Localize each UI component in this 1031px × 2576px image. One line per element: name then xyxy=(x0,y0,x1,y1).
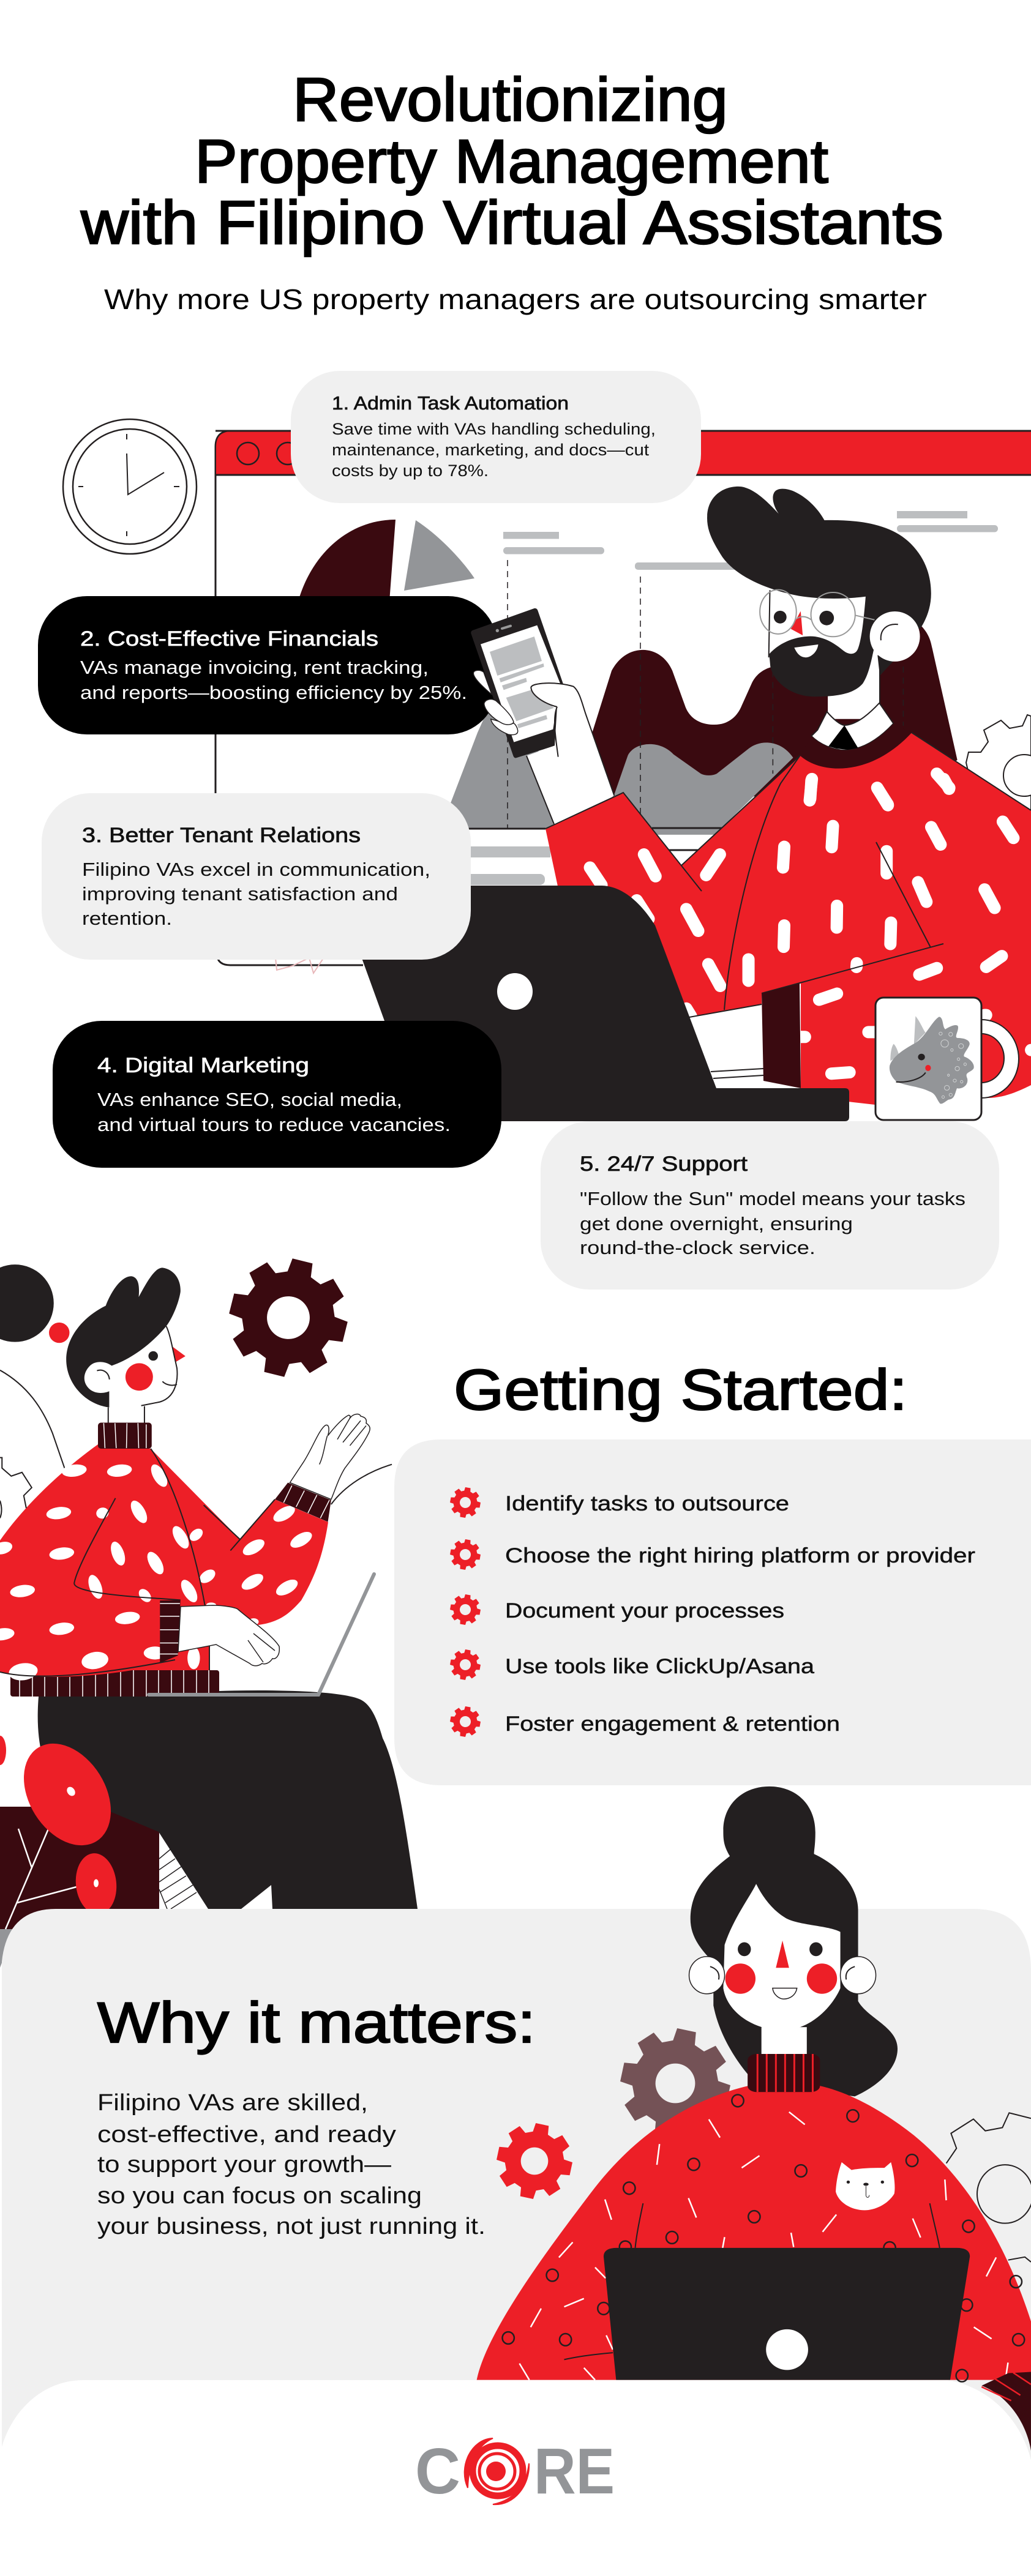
lower chart rules and bars xyxy=(465,828,722,885)
panel: 1. admin task automation: 1. Admin Task Automation xyxy=(332,392,569,414)
dashed guide lines xyxy=(508,560,640,829)
hair xyxy=(66,1267,181,1408)
palm and wrist xyxy=(527,683,614,824)
chart labels xyxy=(503,511,998,570)
title: with Filipino Virtual Assistants xyxy=(80,189,943,257)
cheek xyxy=(126,1363,153,1391)
panel: 1. admin task automation: maintenance, marketing, and docs—cut xyxy=(332,441,650,459)
hair ball xyxy=(0,1264,54,1342)
panel: 1. admin task automation: Save time with VAs handling scheduling, xyxy=(332,420,656,438)
text block: why it matters: your business, not just running it. xyxy=(97,2214,486,2239)
sweater rings xyxy=(503,2095,1024,2381)
icon: outline gear xyxy=(947,2113,1031,2262)
panel: 1. admin task automation xyxy=(291,371,701,503)
sweater collar xyxy=(800,723,912,769)
sweater xyxy=(477,2086,1031,2380)
title: Revolutionizing xyxy=(293,65,728,134)
panel: 5. 24/7 support: round-the-clock service. xyxy=(580,1237,815,1258)
phone and hand xyxy=(471,608,614,824)
browser window xyxy=(216,431,1031,973)
panel: 5. 24/7 support xyxy=(541,1121,999,1290)
pie chart xyxy=(294,520,474,618)
sweater dots xyxy=(0,1462,315,1682)
icon: brown gear xyxy=(611,2019,740,2148)
text block: why it matters xyxy=(97,2090,486,2239)
phone screen xyxy=(481,625,560,742)
man: sweater dots xyxy=(590,779,1031,1073)
gear outline behind man xyxy=(966,715,1031,820)
heading: getting started: Getting Started: xyxy=(454,1357,907,1422)
panel: 2. cost-effective financials: VAs manage invoicing, rent tracking, xyxy=(80,657,429,678)
neck collar xyxy=(98,1423,152,1449)
logo: CORE: C xyxy=(415,2435,460,2507)
neck xyxy=(762,2027,807,2055)
eyes xyxy=(774,611,834,625)
finger lines xyxy=(320,1418,366,1465)
shirt collar xyxy=(811,703,893,750)
laptop xyxy=(604,2248,970,2380)
phone speaker xyxy=(496,626,511,632)
panel: getting started list: Use tools like ClickUp/Asana xyxy=(505,1655,814,1678)
ears xyxy=(689,1957,876,1994)
nose xyxy=(791,611,803,635)
area chart: back and front layers xyxy=(592,625,958,835)
panel: 3. better tenant relations: Filipino VAs excel in communication, xyxy=(82,859,430,880)
panel: getting started list: Foster engagement & retention xyxy=(505,1712,840,1736)
seated woman: upper body, scaled group xyxy=(0,1264,392,1682)
laptop logo xyxy=(766,2329,808,2370)
panel: getting started list: Identify tasks to outsource xyxy=(505,1492,789,1515)
lower cuff xyxy=(160,1600,181,1663)
fingers xyxy=(473,670,518,735)
phone content xyxy=(490,637,554,728)
background outlines xyxy=(0,1370,392,1518)
woman at laptop xyxy=(477,1786,1031,2381)
panel: 3. better tenant relations: retention. xyxy=(82,908,172,929)
panel: getting started list: Document your processes xyxy=(505,1599,784,1622)
panel: 5. 24/7 support: "Follow the Sun" model means your tasks xyxy=(580,1188,965,1209)
raised hand xyxy=(290,1414,370,1499)
eyes xyxy=(738,1943,823,1956)
eye xyxy=(148,1351,158,1361)
sweater seams xyxy=(564,2203,940,2359)
sweater collar xyxy=(748,2054,820,2092)
title: Property Management xyxy=(195,127,828,196)
panel: 4. digital marketing: VAs enhance SEO, social media, xyxy=(97,1089,402,1110)
man: upper chest dots xyxy=(810,774,950,804)
tie xyxy=(828,725,858,750)
plant box and hatching xyxy=(0,1807,208,1968)
panel: 5. 24/7 support: get done overnight, ensuring xyxy=(580,1213,853,1234)
plant leaves and stems xyxy=(0,1728,129,1929)
face xyxy=(769,590,866,657)
footer panel xyxy=(0,2380,1031,2576)
logo: CORE: RE xyxy=(534,2435,615,2507)
seated woman: sweater hem seam xyxy=(0,1616,209,1676)
heading: why it matters: Why it matters: xyxy=(97,1990,536,2055)
seated woman: sweater xyxy=(0,1444,328,1677)
ear shadow xyxy=(877,655,897,676)
glasses xyxy=(760,590,874,637)
icon: red gear xyxy=(490,2117,579,2205)
icon: wall clock xyxy=(63,419,197,554)
man: sweater seams xyxy=(545,733,1031,1010)
panel: 4. digital marketing xyxy=(53,1021,501,1168)
cat badge xyxy=(836,2162,894,2210)
seated woman: trousers xyxy=(38,1690,418,1909)
panel: 2. cost-effective financials: 2. Cost-Effective Financials xyxy=(80,627,378,651)
phone body xyxy=(471,608,569,758)
seated woman: lower hand xyxy=(178,1605,279,1666)
sweater seams xyxy=(74,1449,275,1605)
man: sweater body and arm xyxy=(545,733,1031,1105)
subtitle: Why more US property managers are outsourcing smarter xyxy=(104,283,927,315)
panel: 2. cost-effective financials xyxy=(38,596,497,734)
raised cuff xyxy=(275,1482,331,1522)
panel: 4. digital marketing: 4. Digital Marketing xyxy=(97,1054,309,1077)
title xyxy=(80,65,943,257)
text block: why it matters: cost-effective, and ready xyxy=(97,2122,396,2148)
panel: 2. cost-effective financials: and reports—boosting efficiency by 25%. xyxy=(80,682,467,703)
logo: CORE xyxy=(415,2435,615,2507)
panel: 3. better tenant relations: 3. Better Tenant Relations xyxy=(82,824,361,847)
text block: why it matters: so you can focus on scaling xyxy=(97,2183,422,2209)
hair xyxy=(691,1786,898,2096)
text block: why it matters: Filipino VAs are skilled, xyxy=(97,2090,368,2116)
seated woman: laptop xyxy=(149,1574,374,1695)
panel: 5. 24/7 support: 5. 24/7 Support xyxy=(580,1152,748,1176)
sweater dashes xyxy=(519,2112,1008,2380)
red dot xyxy=(49,1323,69,1343)
text block: why it matters: to support your growth— xyxy=(97,2152,391,2178)
nose xyxy=(172,1346,186,1362)
nose and cheeks xyxy=(725,1941,837,1994)
panel: getting started list xyxy=(394,1439,1031,1785)
face xyxy=(723,1884,841,2031)
man: head xyxy=(707,487,931,769)
ear xyxy=(97,1370,110,1379)
hair xyxy=(707,487,931,637)
icon: dark gear xyxy=(217,1247,359,1389)
seated woman: hem xyxy=(10,1670,219,1697)
area chart: left mountain xyxy=(441,692,554,829)
man: hand and cuff xyxy=(689,984,801,1096)
panel: 3. better tenant relations xyxy=(42,793,471,960)
laptop xyxy=(336,886,849,1121)
panel: 4. digital marketing: and virtual tours to reduce vacancies. xyxy=(97,1114,451,1135)
panel: 3. better tenant relations: improving tenant satisfaction and xyxy=(82,883,398,905)
mug with dinosaur xyxy=(875,998,1019,1120)
ear xyxy=(870,611,920,662)
panel: 1. admin task automation: costs by up to 78%. xyxy=(332,461,489,480)
cuff at corner xyxy=(981,2372,1031,2451)
mouth xyxy=(773,1988,797,1999)
beard xyxy=(769,597,874,696)
mouth xyxy=(794,644,818,657)
face outline xyxy=(108,1326,177,1423)
panel: why it matters background xyxy=(2,1909,1031,2509)
panel: getting started list: Choose the right hiring platform or provider xyxy=(505,1544,975,1567)
neck xyxy=(828,651,880,719)
